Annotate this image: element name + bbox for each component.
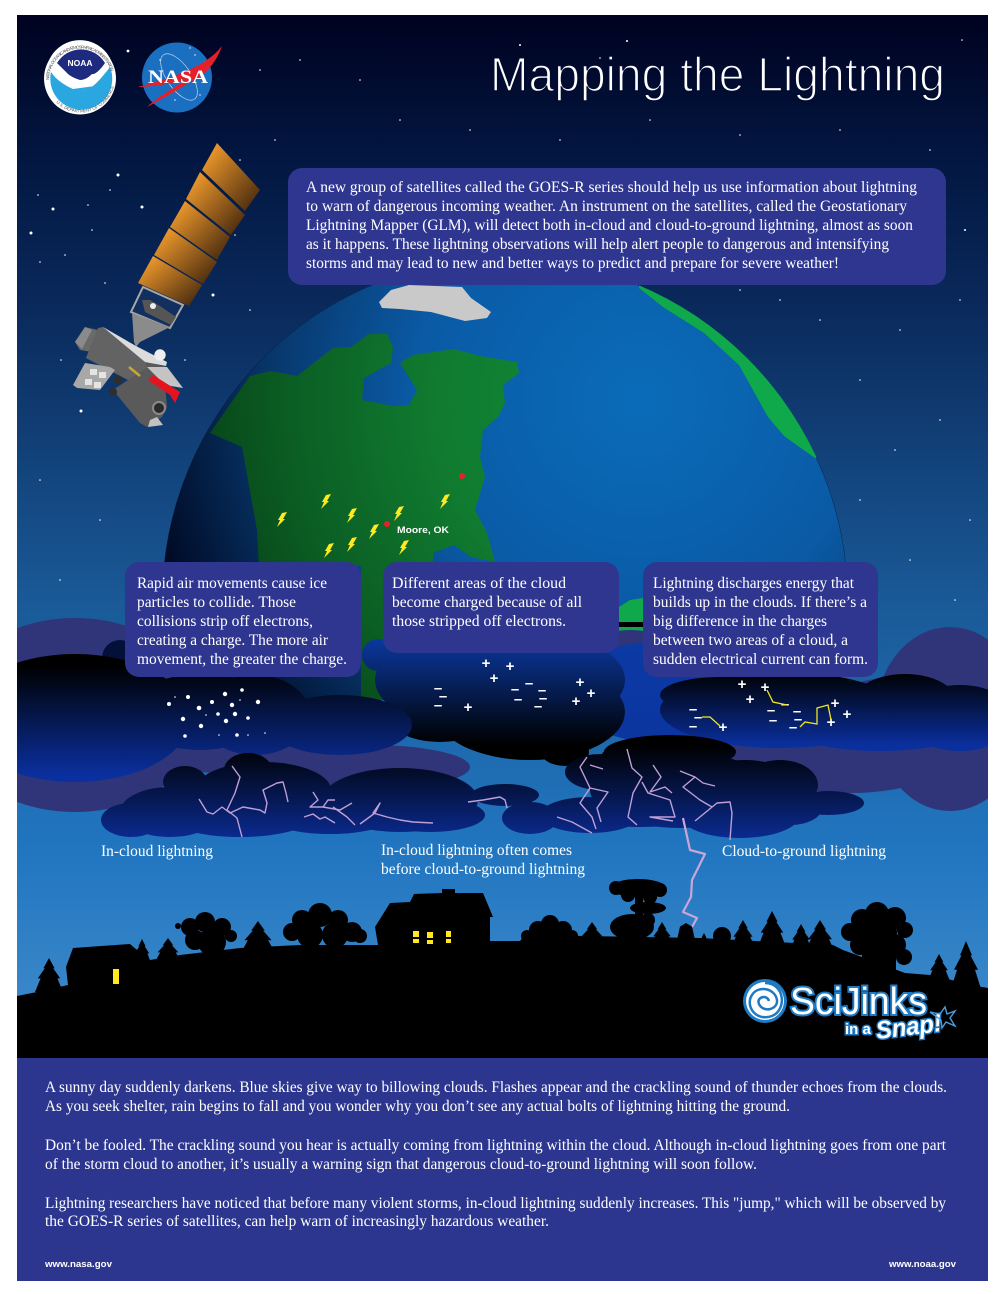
NOAA logo: U.S. DEPARTMENT OF COMMERCE	[56, 86, 114, 112]
label: in-cloud precedes cloud-to-ground: before cloud-to-ground lightning	[381, 861, 585, 878]
deciduous trees	[195, 912, 215, 932]
continent: North America	[210, 334, 519, 700]
SciJinks logo: Snap!	[874, 1009, 943, 1045]
satellite	[73, 143, 260, 427]
callout: discharge: builds up in the clouds. If there’s a	[653, 594, 867, 611]
back storm clouds	[0, 618, 1000, 812]
charges: center cloud: +	[576, 674, 585, 691]
lower storm clouds	[101, 735, 864, 838]
callout: discharge: big difference in the charges	[653, 613, 827, 630]
charges: center cloud: –	[434, 697, 442, 714]
NOAA logo	[44, 40, 116, 114]
charges: right cloud: –	[689, 701, 697, 718]
SciJinks logo: in a	[845, 1021, 871, 1038]
ice cap	[379, 285, 491, 321]
lens	[153, 402, 165, 414]
bottom text panel: Don’t be fooled. The crackling sound you hear is actually coming from lightning within the cloud. Although in-cloud lightning goes from one part	[45, 1137, 947, 1154]
charges: center cloud: +	[490, 670, 499, 687]
callout: charged cloud: those stripped off electrons.	[392, 613, 566, 630]
charges: center cloud: +	[572, 693, 581, 710]
dome	[154, 349, 166, 361]
charges: center cloud: +	[482, 655, 491, 672]
title: Mapping the Lightning	[490, 49, 945, 102]
conifers	[35, 958, 63, 992]
earth globe	[164, 285, 846, 700]
NOAA logo: NATIONAL OCEANIC AND ATMOSPHERIC ADMINISTRATION	[46, 46, 114, 80]
bottom text panel: A sunny day suddenly darkens. Blue skies give way to billowing clouds. Flashes appear and the crackling sound of thunder echoes from the clouds.	[45, 1079, 947, 1096]
callout: discharge: Lightning discharges energy that	[653, 575, 855, 592]
illustration: ice crystals	[167, 688, 266, 738]
landscape silhouette	[17, 879, 988, 1060]
charges: right cloud: –	[767, 702, 775, 719]
bottom text panel: Lightning researchers have noticed that before many violent storms, in-cloud lightning suddenly increases. This "jump," which will be observed by	[45, 1195, 946, 1212]
label: cloud-to-ground lightning: Cloud-to-ground lightning	[722, 843, 886, 860]
charges: center cloud: +	[587, 685, 596, 702]
charges: right cloud: –	[694, 709, 702, 726]
charges: right cloud: +	[761, 679, 770, 696]
cone	[132, 313, 170, 347]
charges: center cloud: –	[514, 691, 522, 708]
continent: South America tip	[619, 598, 643, 631]
charges: right cloud: +	[746, 691, 755, 708]
charges: center cloud: +	[464, 699, 473, 716]
intro text panel: as it happens. These lightning observations will help alert people to dangerous and intensifying	[306, 236, 889, 253]
charges: center cloud	[434, 655, 596, 716]
charges: center cloud: –	[538, 682, 546, 699]
callout: charged cloud: become charged because of all	[392, 594, 583, 611]
center cloud	[362, 639, 712, 766]
continent: Africa edge	[639, 285, 816, 458]
stars	[30, 39, 971, 601]
callout: charged cloud: Different areas of the cloud	[392, 575, 566, 592]
left cloud	[0, 640, 412, 782]
charges: center cloud: –	[525, 675, 533, 692]
label: in-cloud lightning: In-cloud lightning	[101, 843, 213, 860]
intro text panel: Lightning Mapper (GLM), will detect both in-cloud and cloud-to-ground lightning, almost as soon	[306, 217, 913, 234]
callout: charged cloud	[383, 562, 619, 653]
intro text panel: storms and may lead to new and better ways to predict and prepare for severe weather!	[306, 255, 839, 272]
top plate	[103, 327, 167, 366]
intro text panel: A new group of satellites called the GOES-R series should help us use information about lightning	[306, 179, 917, 196]
charges: right cloud: –	[689, 718, 697, 735]
charges: center cloud: –	[539, 690, 547, 707]
callout: ice particles: Rapid air movements cause ice	[137, 575, 327, 592]
callout: ice particles: collisions strip off electrons,	[137, 613, 313, 630]
charges: center cloud: –	[434, 680, 442, 697]
footer link: NOAA: www.noaa.gov	[888, 1259, 956, 1269]
bottom text panel: of the storm cloud to another, it’s usually a warning sign that dangerous cloud-to-ground lightning will soon follow.	[45, 1156, 757, 1173]
right cloud	[660, 672, 1000, 751]
main body	[86, 328, 183, 427]
intro text panel	[288, 168, 946, 285]
charges: right cloud: –	[789, 719, 797, 736]
map marker: east coast	[459, 473, 465, 479]
bottom text panel: As you seek shelter, rain begins to fall and you wonder why you don’t see any actual bolts of lightning hitting the ground.	[45, 1098, 790, 1115]
callout: ice particles: creating a charge. The more air	[137, 632, 329, 649]
callout: ice particles: movement, the greater the charge.	[137, 651, 347, 668]
upper storm clouds	[0, 622, 1000, 782]
charges: right cloud: +	[843, 706, 852, 723]
charges: right cloud	[689, 676, 852, 736]
callout: discharge: between two areas of a cloud, a	[653, 632, 848, 649]
footer link: NASA: www.nasa.gov	[44, 1259, 112, 1269]
intro text panel: to warn of dangerous incoming weather. An instrument on the satellites, called the Geostationary	[306, 198, 907, 215]
callout: ice particles: particles to collide. Those	[137, 594, 296, 611]
instrument grid	[73, 363, 115, 390]
callout: discharge	[643, 562, 878, 677]
yellow part	[129, 367, 140, 376]
mast frame	[131, 287, 183, 328]
SciJinks logo	[743, 979, 955, 1045]
charges: right cloud: +	[719, 719, 728, 736]
charges: right cloud: –	[781, 696, 789, 713]
yellow charge discharges	[702, 690, 831, 727]
charges: center cloud: –	[511, 681, 519, 698]
callout: discharge: sudden electrical current can form.	[653, 651, 868, 668]
bottom text panel: the GOES-R series of satellites, can help warn of increasingly hazardous weather.	[45, 1213, 549, 1230]
SciJinks logo: SciJinks	[790, 981, 927, 1023]
label: in-cloud precedes cloud-to-ground: In-cloud lightning often comes	[381, 842, 572, 859]
in-cloud lightning strokes	[199, 749, 732, 840]
charges: right cloud: +	[738, 676, 747, 693]
charges: right cloud: –	[793, 703, 801, 720]
charges: center cloud: –	[439, 688, 447, 705]
charges: right cloud: +	[831, 695, 840, 712]
charges: right cloud: +	[827, 714, 836, 731]
map marker: Moore	[384, 521, 390, 527]
lightning bolts on map	[277, 494, 450, 558]
NOAA logo: NOAA	[68, 58, 92, 68]
red instrument	[148, 375, 180, 403]
charges: center cloud: –	[534, 698, 542, 715]
side box	[75, 327, 102, 352]
cloud-to-ground lightning bolt	[683, 818, 705, 927]
solar panels	[138, 143, 260, 306]
NASA logo: NASA	[148, 67, 208, 88]
callout: ice particles	[125, 562, 361, 677]
NASA logo	[138, 42, 222, 112]
charges: center cloud: +	[506, 658, 515, 675]
ground and houses	[17, 889, 988, 1060]
map label: Moore, OK	[397, 525, 450, 535]
bottom text panel	[17, 1058, 988, 1281]
lit windows	[113, 931, 451, 984]
charges: right cloud: –	[794, 711, 802, 728]
label: in-cloud precedes cloud-to-ground	[381, 842, 585, 878]
charges: right cloud: –	[769, 712, 777, 729]
